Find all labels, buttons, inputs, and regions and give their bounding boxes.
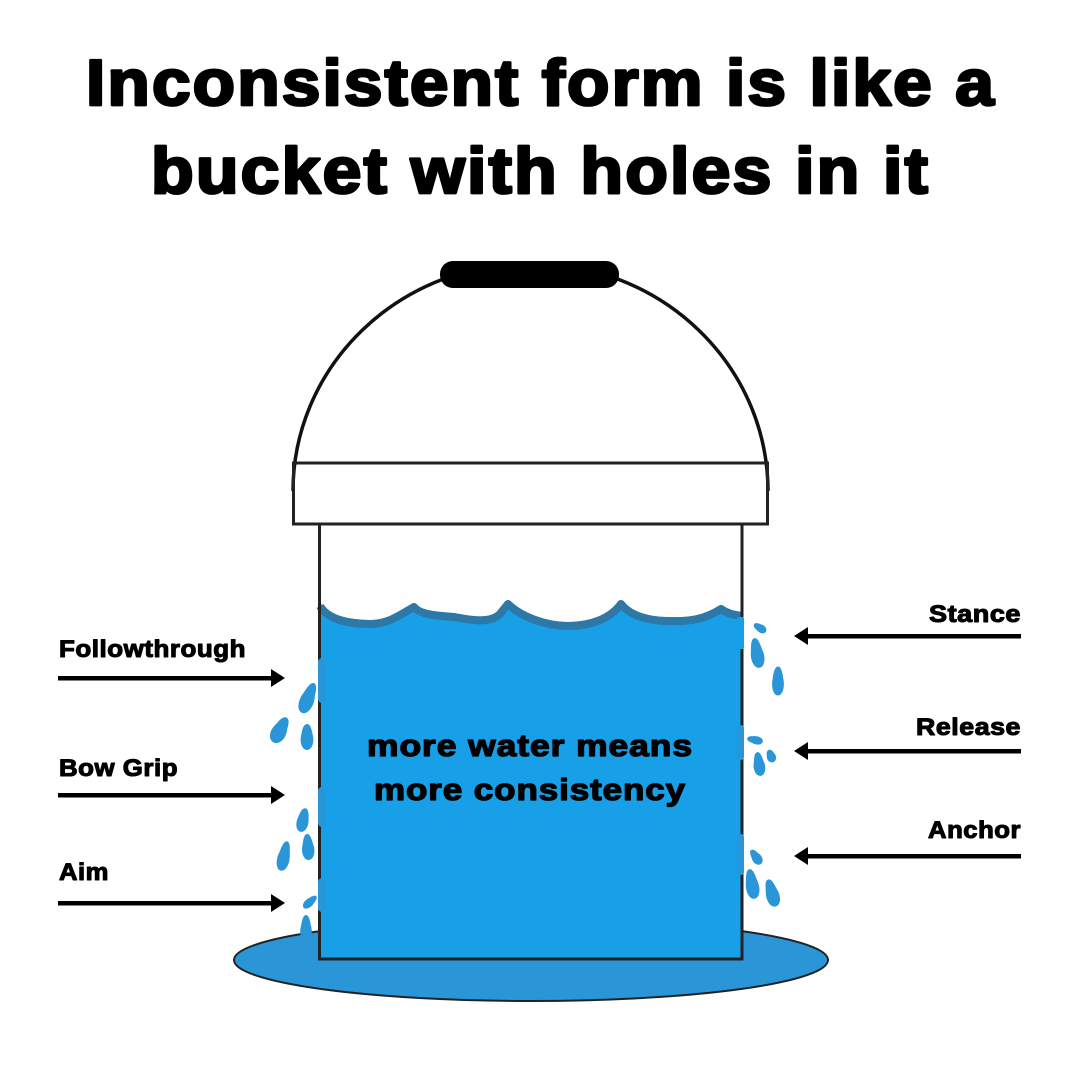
bucket caption — [367, 728, 693, 807]
arrow: Bow Grip — [58, 786, 285, 804]
water surface line — [320, 604, 741, 626]
arrow: Aim — [58, 894, 285, 912]
title — [86, 46, 996, 207]
label: Release: Release — [916, 714, 1021, 741]
bucket caption: more consistency — [374, 772, 686, 807]
bucket rim — [294, 463, 768, 524]
label: Followthrough: Followthrough — [59, 636, 246, 663]
bucket — [293, 261, 768, 959]
arrow: Release — [794, 742, 1021, 760]
puddle — [234, 919, 828, 1001]
water — [320, 600, 741, 958]
title: bucket with holes in it — [151, 134, 930, 207]
bucket caption: more water means — [367, 728, 693, 763]
leak patches at the holes — [318, 617, 744, 912]
bucket handle wire — [293, 263, 768, 491]
label: Stance: Stance — [929, 601, 1021, 628]
bucket handle grip — [440, 261, 619, 288]
label: Anchor: Anchor — [928, 817, 1021, 844]
label: Bow Grip: Bow Grip — [59, 755, 178, 782]
water drops right — [743, 621, 784, 908]
bucket walls — [320, 524, 742, 959]
arrow: Anchor — [794, 847, 1021, 865]
water drops left — [267, 681, 321, 941]
arrow: Followthrough — [58, 669, 285, 687]
arrow: Stance — [794, 627, 1021, 645]
label: Aim: Aim — [59, 859, 109, 886]
title: Inconsistent form is like a — [86, 46, 996, 119]
